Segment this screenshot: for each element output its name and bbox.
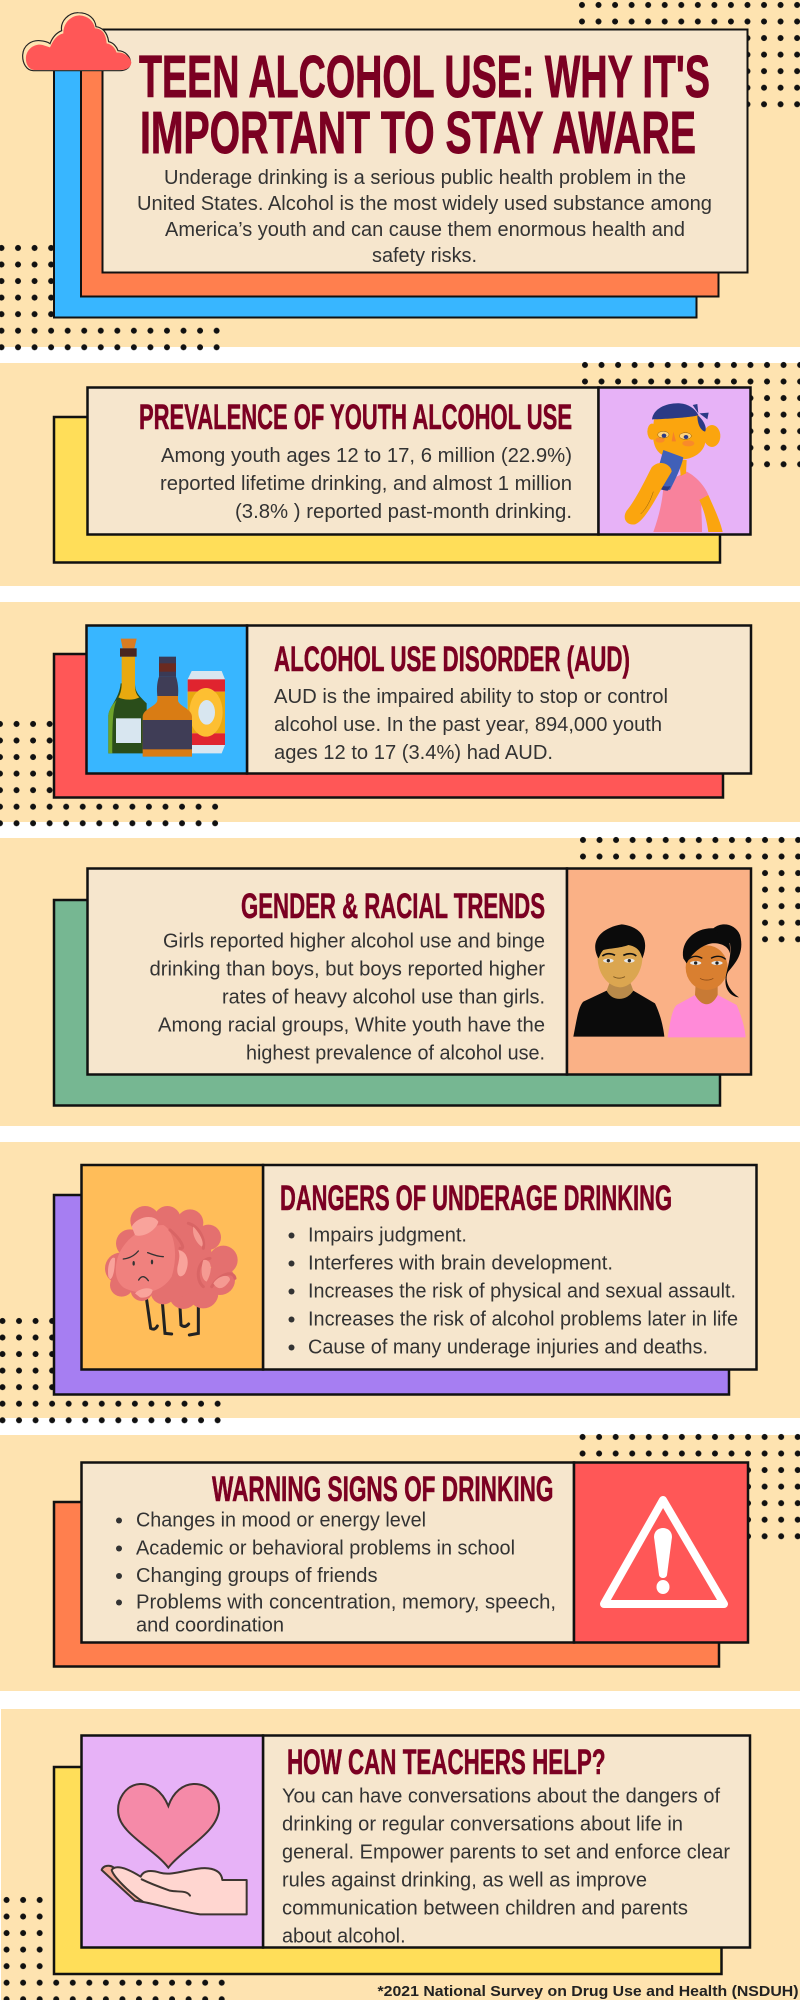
bullet list: Cause of many underage injuries and deaths. [308,1336,708,1358]
body text: reported lifetime drinking, and almost 1 million [160,473,572,495]
body text: Girls reported higher alcohol use and binge [163,930,545,952]
backing card: purple [54,1195,729,1394]
footnote: *2021 National Survey on Drug Use and Health (NSDUH) [378,1983,798,2000]
body text: highest prevalence of alcohol use. [246,1042,545,1064]
text card [88,388,598,534]
panel: gender and racial trends [54,868,751,1106]
intro text: United States. Alcohol is the most widely used substance among [137,193,712,215]
icon: heart in hand [102,1784,247,1914]
title stacked backing cards [54,30,748,318]
text card [88,868,567,1074]
image panel: orange [82,1165,263,1370]
heading: HOW CAN TEACHERS HELP? [287,1743,606,1782]
bullet list: Increases the risk of physical and sexual assault. [308,1280,736,1302]
body text: AUD is the impaired ability to stop or control [274,686,668,708]
body text: general. Empower parents to set and enforce clear [282,1842,730,1864]
heading: WARNING SIGNS OF DRINKING [212,1470,554,1509]
bullet list: Changing groups of friends [136,1565,378,1587]
body text: alcohol use. In the past year, 894,000 youth [274,714,662,736]
body text [160,445,572,523]
body text: rules against drinking, as well as improve [282,1870,647,1892]
icon: sad brain [105,1206,238,1335]
icon: child drinking [625,403,723,532]
backing card: green [54,900,720,1106]
backing card: orange [54,1502,719,1666]
bullet list: Academic or behavioral problems in school [136,1538,515,1560]
body text: (3.8% ) reported past-month drinking. [235,501,572,523]
image panel: lilac [82,1736,263,1948]
text card [263,1165,756,1370]
intro text: safety risks. [372,245,477,267]
bullet list: Interferes with brain development. [308,1252,613,1274]
title [139,44,710,166]
backing card: yellow [54,1767,722,1974]
icon: alcohol bottles [108,639,225,757]
body text: Among youth ages 12 to 17, 6 million (22.9%) [161,445,572,467]
panel: warning signs of drinking [54,1462,748,1666]
panel: dangers of underage drinking [54,1165,756,1394]
bullet list: Changes in mood or energy level [136,1510,426,1532]
heading: GENDER & RACIAL TRENDS [241,887,545,926]
intro text: Underage drinking is a serious public health problem in the [164,167,686,189]
panel: title [23,13,747,318]
bullet list: Problems with concentration, memory, speech, [136,1592,556,1614]
icon: warning triangle [604,1500,724,1604]
intro text [137,167,712,267]
image panel: peach [567,868,751,1074]
body text: communication between children and parents [282,1898,688,1920]
bullet list [116,1510,556,1636]
text card [263,1736,750,1948]
text card [247,626,751,774]
body text: ages 12 to 17 (3.4%) had AUD. [274,742,553,764]
backing card: yellow [54,417,720,562]
image panel: red [574,1462,748,1642]
panel: prevalence of youth alcohol use [54,388,750,562]
body text: drinking or regular conversations about life in [282,1814,683,1836]
icon: two teens [573,924,746,1037]
body text [274,686,668,764]
body text: about alcohol. [282,1926,406,1948]
image panel: lilac [598,388,750,534]
text card [82,1462,574,1642]
body text: You can have conversations about the dangers of [282,1786,720,1808]
panel: how can teachers help [54,1736,750,1974]
icon: cloud [23,13,131,71]
body text: drinking than boys, but boys reported higher [150,958,545,980]
body text [150,930,545,1064]
body text [282,1786,730,1948]
body text: rates of heavy alcohol use than girls. [222,986,545,1008]
bullet list: Impairs judgment. [308,1224,467,1246]
bullet list [288,1224,738,1358]
panel: alcohol use disorder [54,626,751,798]
intro text: America’s youth and can cause them enormous health and [165,219,685,241]
image panel: blue [86,626,247,774]
bullet list: Increases the risk of alcohol problems later in life [308,1308,738,1330]
backing card: red [54,654,723,798]
body text: Among racial groups, White youth have the [158,1014,545,1036]
bullet list: and coordination [136,1614,284,1636]
